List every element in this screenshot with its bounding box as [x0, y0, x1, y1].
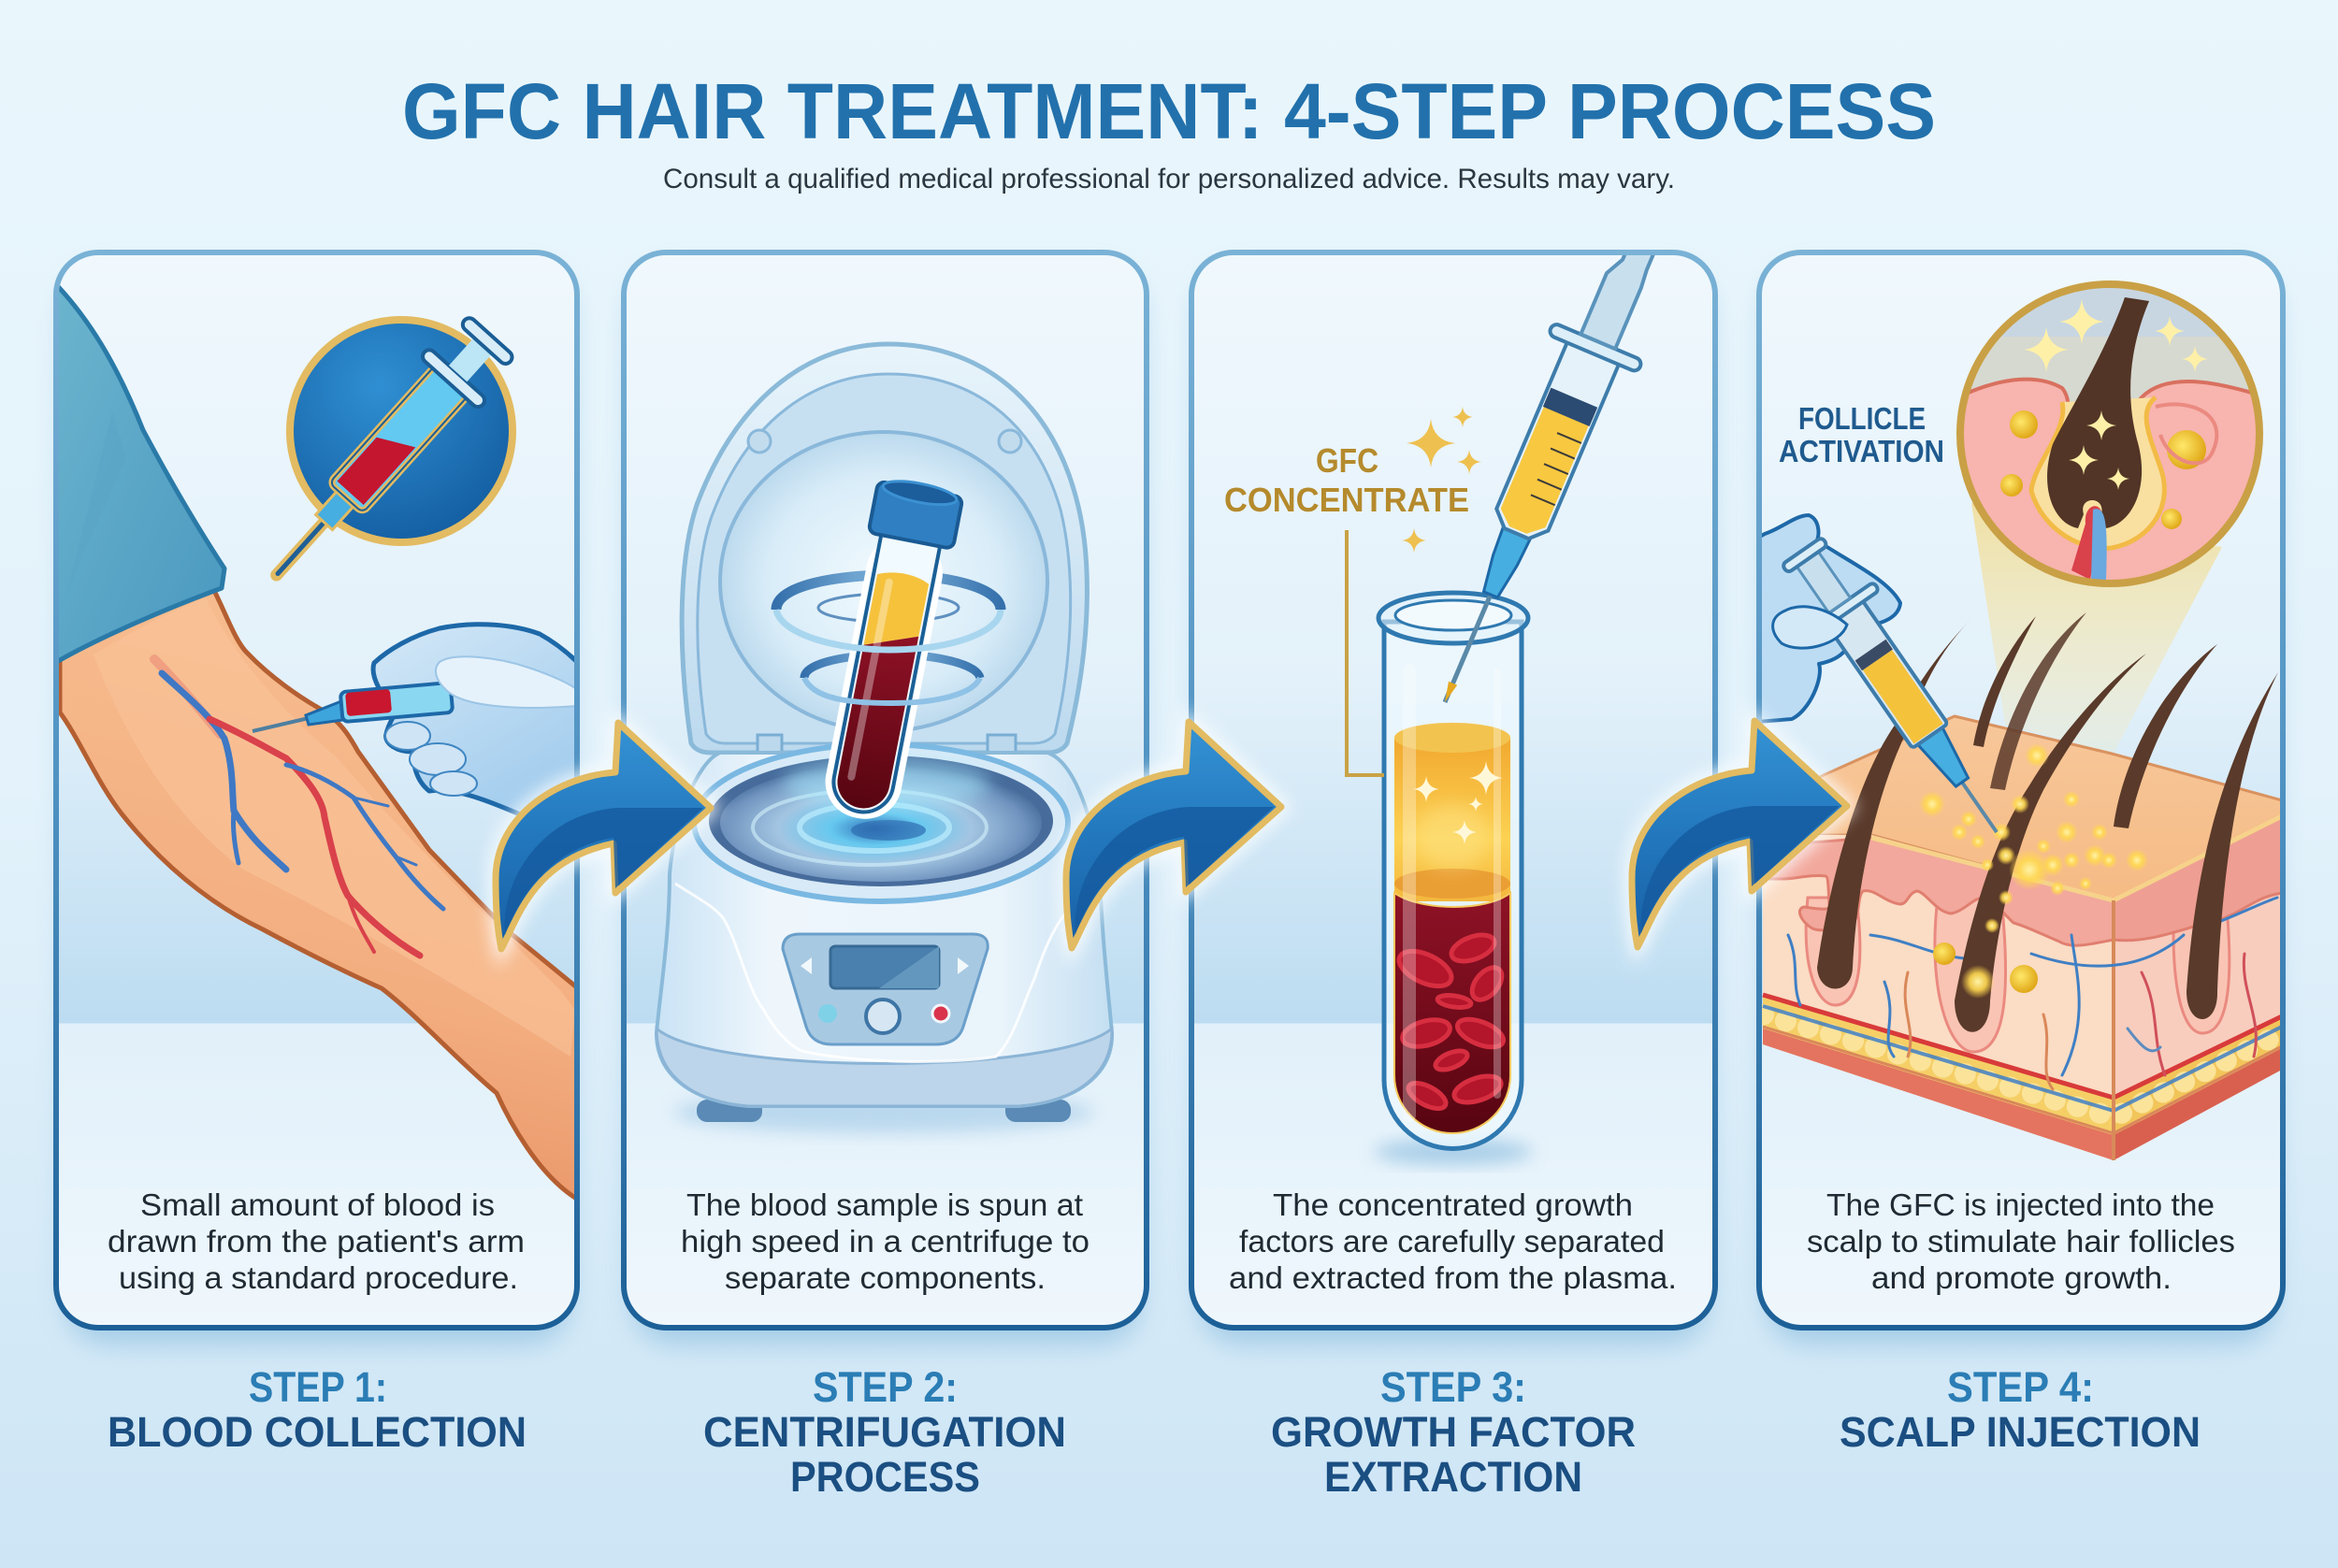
text: step 4 description: scalp to stimulate hair follicles [1807, 1224, 2235, 1259]
syringe in hand [253, 683, 453, 731]
control panel [783, 934, 988, 1044]
heading: step 2: PROCESS [790, 1453, 980, 1501]
text: step 2 description: separate components. [725, 1260, 1046, 1295]
gold fat balls [1933, 942, 1956, 965]
heading: step 2: STEP 2: [813, 1363, 958, 1411]
heading: step 4: STEP 4: [1947, 1363, 2094, 1411]
text: step 2 description [681, 1187, 1090, 1295]
text: step 4 description [1807, 1187, 2235, 1295]
gold growth sparks [1919, 743, 2148, 999]
heading: step 1 [108, 1363, 527, 1456]
follicle pockets [1806, 898, 2230, 1052]
illustration: test tube and syringe [1374, 201, 1695, 1165]
illustration: centrifuge [657, 344, 1112, 1133]
sleeve [52, 281, 224, 664]
heading: step 1: BLOOD COLLECTION [108, 1408, 527, 1456]
text: step 2 description: high speed in a centrifuge to [681, 1224, 1090, 1259]
syringe [1442, 255, 1655, 703]
arrow: step 2 to step 3 [1066, 722, 1281, 948]
callout: GFC concentrate label: GFC [1316, 441, 1378, 480]
text: step 2 description: The blood sample is spun at [686, 1187, 1083, 1222]
text: step 3 description: The concentrated growth [1273, 1187, 1633, 1222]
label: follicle activation: ACTIVATION [1779, 434, 1944, 468]
callout: GFC concentrate label [1224, 441, 1469, 775]
heading: step 2 [703, 1363, 1066, 1501]
illustration: arm with veins [52, 281, 599, 1216]
panel: step 3 growth factor extraction [1191, 201, 1715, 1345]
heading: step 3: EXTRACTION [1324, 1453, 1582, 1501]
arrow: step 1 to step 2 [496, 723, 711, 949]
text: step 1 description: using a standard procedure. [119, 1260, 518, 1295]
inset: follicle activation magnifier [1956, 281, 2263, 587]
gloved hand [370, 622, 574, 815]
syringe [1782, 537, 1999, 834]
callout: GFC concentrate label: CONCENTRATE [1224, 481, 1469, 519]
title: GFC HAIR TREATMENT: 4-STEP PROCESS [402, 67, 1936, 155]
text: step 4 description: The GFC is injected into the [1826, 1187, 2215, 1222]
swirl front [776, 610, 1001, 650]
text: step 3 description: and extracted from the plasma. [1229, 1260, 1677, 1295]
hairs [1817, 612, 2278, 1032]
illustration: skin cross-section [1763, 716, 2282, 1160]
icon: syringe medallion [247, 309, 521, 601]
text: step 4 description: and promote growth. [1871, 1260, 2172, 1295]
text: step 1 description: Small amount of blood is [140, 1187, 495, 1222]
text: step 3 description [1229, 1187, 1677, 1295]
heading: step 2: CENTRIFUGATION [703, 1408, 1066, 1456]
label: follicle activation [1779, 401, 1944, 468]
panel: step 1 blood collection [52, 252, 599, 1345]
panel: step 4 scalp injection [1758, 252, 2283, 1345]
test tube [815, 476, 964, 824]
heading: step 4: SCALP INJECTION [1840, 1408, 2201, 1456]
heading: step 4 [1840, 1363, 2201, 1456]
subtitle disclaimer: Consult a qualified medical professional for personalized advice. Results may vary. [663, 164, 1675, 194]
heading: step 1: STEP 1: [249, 1363, 387, 1411]
heading: step 3 [1271, 1363, 1636, 1501]
vessels [1788, 898, 2277, 1089]
label: follicle activation: FOLLICLE [1798, 401, 1926, 436]
swirl back [776, 575, 1001, 610]
heading: step 3: STEP 3: [1380, 1363, 1526, 1411]
beam from magnifier [1971, 503, 2222, 754]
text: step 1 description [108, 1187, 525, 1295]
heading: step 3: GROWTH FACTOR [1271, 1408, 1636, 1456]
panel: step 2 centrifugation [624, 252, 1147, 1345]
text: step 3 description: factors are carefully separated [1239, 1224, 1665, 1259]
icon: gold sparkles [1402, 407, 1481, 553]
text: step 1 description: drawn from the patient's arm [108, 1224, 525, 1259]
blood cells [1393, 930, 1508, 1114]
arrow: step 3 to step 4 [1632, 721, 1847, 947]
gloved hand holding syringe [1758, 515, 1900, 722]
